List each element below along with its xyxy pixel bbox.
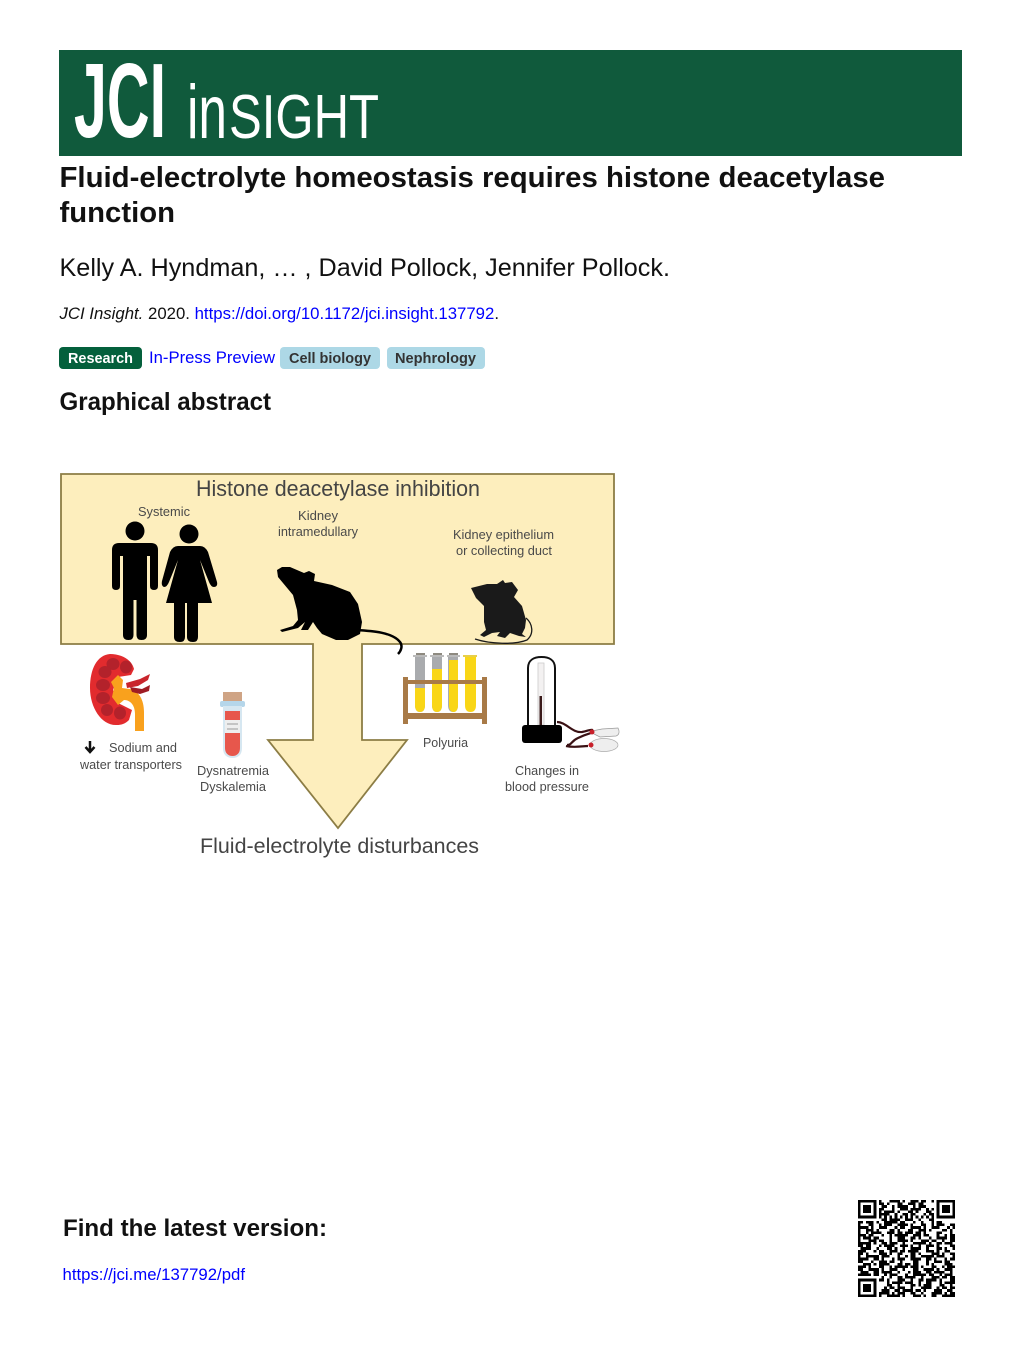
icon: down arrow [86,741,94,752]
article title: function [60,197,175,229]
article title: Fluid-electrolyte homeostasis requires histone deacetylase [60,162,885,194]
label: polyuria: Polyuria [423,735,469,750]
label: sodium and water transporters [79,740,182,772]
label: systemic: Systemic [138,504,190,519]
journal logo banner: SIGHT [229,83,379,152]
citation: JCI Insight. 2020. https://doi.org/10.1172/jci.insight.137792. [58,304,499,323]
diagram heading: Histone deacetylase inhibition [196,476,480,501]
label: dysnatremia dyskalemia: Dysnatremia [197,763,270,778]
icon: woman [162,524,217,642]
link: in-press preview: In-Press Preview [149,349,275,367]
article tags [59,347,485,369]
label: changes in blood pressure: Changes in [515,763,579,778]
diagram outcome label: Fluid-electrolyte disturbances [200,835,479,858]
icon: kidney [90,654,150,731]
label: changes in blood pressure: blood pressure [505,779,589,794]
label: kidney intramedullary: intramedullary [278,524,358,539]
label: kidney epithelium: Kidney epithelium [453,527,554,542]
label: kidney epithelium [453,527,554,558]
heading: graphical abstract: Graphical abstract [60,388,272,416]
icon: mouse [471,580,532,643]
label: kidney intramedullary [278,508,358,539]
label: dysnatremia dyskalemia [197,763,270,794]
tag: nephrology [387,347,485,369]
QR code [858,1200,955,1297]
label: kidney intramedullary: Kidney [298,508,339,523]
tag: research: Research [68,351,133,367]
journal logo banner: in [187,70,227,155]
tag: cell biology [280,347,380,369]
graphical abstract diagram [61,474,619,858]
label: changes in blood pressure [505,763,589,794]
label: dysnatremia dyskalemia: Dyskalemia [200,779,267,794]
label: sodium and water transporters: Sodium and [109,740,177,755]
link: pdf url: https://jci.me/137792/pdf [62,1266,245,1284]
icon: rat [277,567,401,654]
icon: sphygmomanometer [522,657,619,752]
heading: find the latest version: Find the latest version: [63,1215,327,1242]
icon: urine tubes in rack [403,653,487,724]
journal logo banner [59,42,962,160]
journal logo banner: JCI [74,42,166,160]
tag: research [59,347,142,369]
icon: blood tube [220,692,245,758]
icon: man [112,522,158,640]
label: sodium and water transporters: water transporters [79,757,182,772]
label: kidney epithelium: or collecting duct [456,543,552,558]
article title [60,162,885,229]
authors: Kelly A. Hyndman, … , David Pollock, Jennifer Pollock. [60,254,670,282]
tag: nephrology: Nephrology [395,351,476,367]
panel: inhibition box with downward arrow [61,474,614,828]
tag: cell biology: Cell biology [289,351,371,367]
